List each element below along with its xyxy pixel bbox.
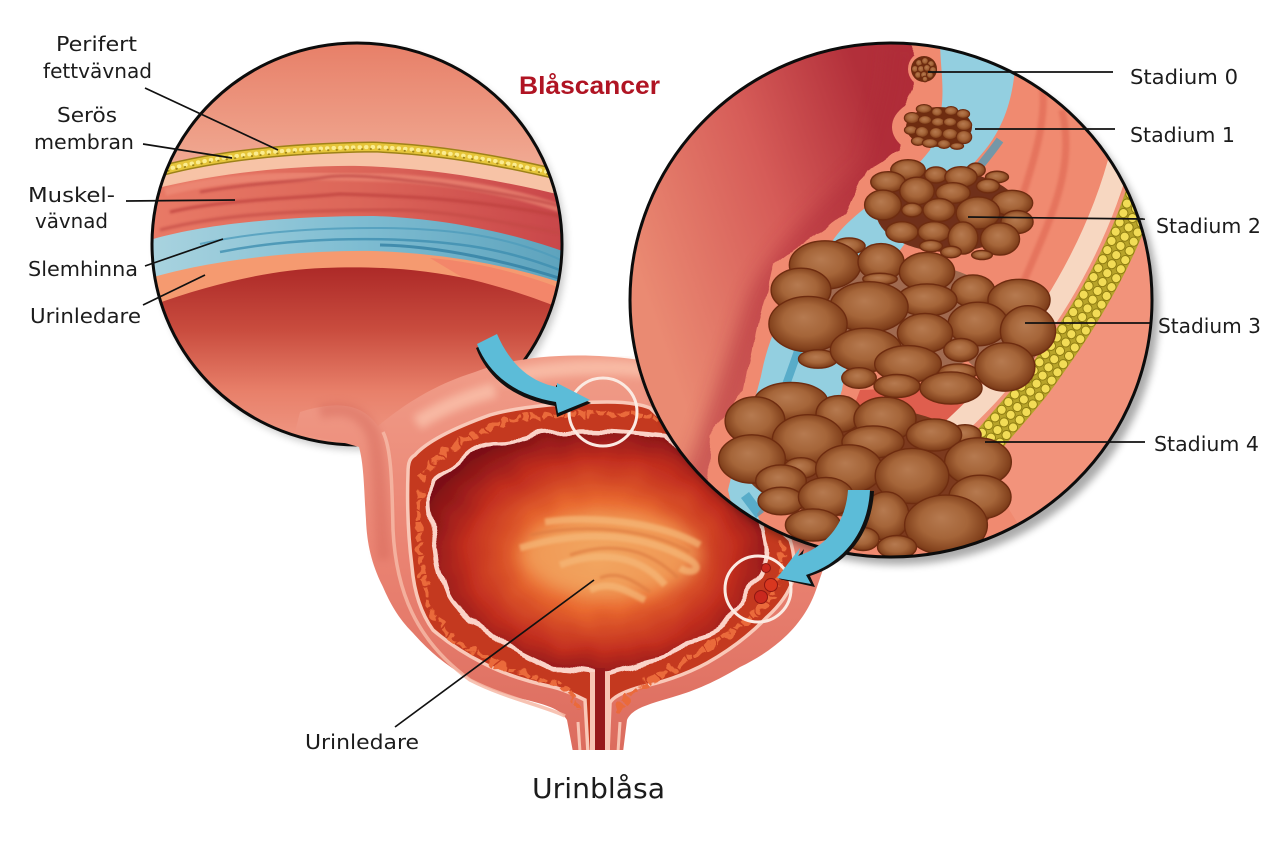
arrow: from stage 4 tumour to bladder wall <box>777 490 874 587</box>
title: Blåscancer <box>519 72 660 100</box>
labels: cancer stages <box>1130 65 1261 456</box>
bladder outer tissue <box>295 356 840 752</box>
labels: cancer stages: Stadium 1 <box>1130 123 1235 147</box>
labels: wall layers: Urinledare <box>30 304 141 328</box>
tumour: stage 0 <box>911 56 937 82</box>
labels: cancer stages: Stadium 4 <box>1154 432 1259 456</box>
callout circle: top <box>569 378 637 446</box>
leader lines: layers and stages <box>126 72 1150 727</box>
labels: wall layers <box>28 32 152 328</box>
tumour: stage 4 <box>719 382 1011 558</box>
labels: wall layers: Slemhinna <box>28 257 138 281</box>
yellow fat layer <box>160 147 560 175</box>
arrow: from left circle to bladder wall <box>476 334 591 417</box>
label: urinary bladder: Urinblåsa <box>532 772 665 805</box>
panel: left magnified wall layers circle <box>150 40 566 450</box>
panel: urinary bladder cross-section <box>295 356 840 752</box>
labels: wall layers: Perifert <box>56 32 137 56</box>
labels: wall layers: membran <box>34 130 134 154</box>
labels: cancer stages: Stadium 2 <box>1156 214 1261 238</box>
tumour: stage 2 <box>865 160 1033 260</box>
tissue layers <box>707 45 1150 556</box>
label: urinledare pointer: Urinledare <box>305 730 419 754</box>
labels: cancer stages: Stadium 0 <box>1130 65 1238 89</box>
labels: wall layers: vävnad <box>35 209 108 233</box>
lumen folds <box>520 513 700 600</box>
labels: wall layers: Muskel- <box>28 183 115 207</box>
bladder lumen <box>429 432 766 673</box>
urethra channel <box>578 668 620 752</box>
callout circle: tumour site <box>725 556 791 622</box>
panel: right cancer stages circle <box>625 30 1170 570</box>
labels: wall layers: Serös <box>57 103 117 127</box>
tumour: stage 1 <box>904 105 972 149</box>
bladder wall <box>408 402 794 752</box>
labels: wall layers: fettvävnad <box>43 59 152 83</box>
labels: cancer stages: Stadium 3 <box>1158 314 1261 338</box>
tube pale contour <box>383 432 565 716</box>
tumour: stage 3 <box>769 238 1056 404</box>
tumour spots in wall <box>754 564 778 604</box>
